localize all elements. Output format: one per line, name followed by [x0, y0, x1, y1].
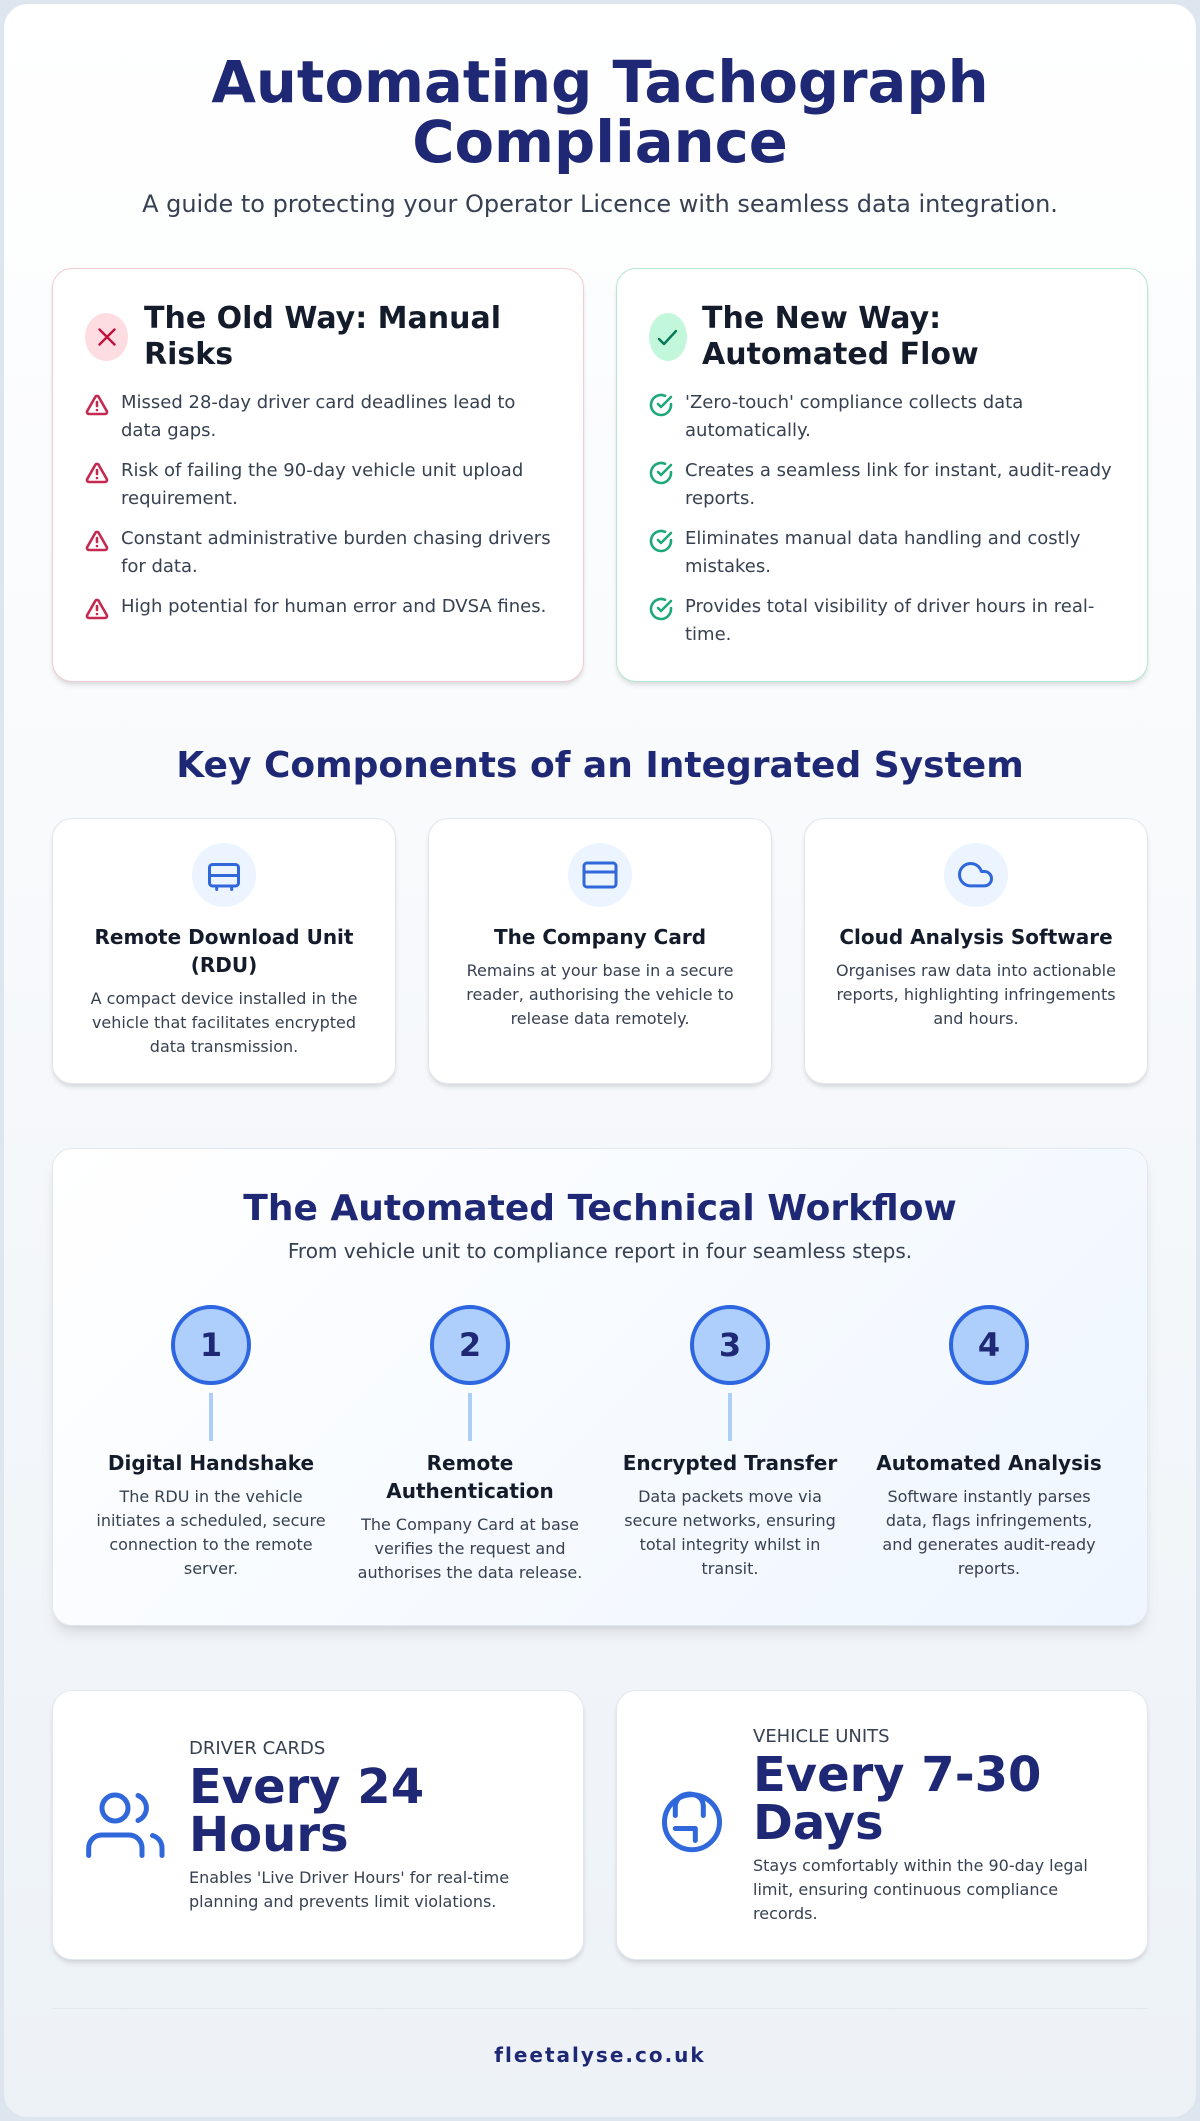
risk item 3: Constant administrative burden chasing drivers: [121, 528, 551, 549]
text: remote download unit: [90, 925, 357, 1056]
step description 2: authorises the data release.: [358, 1563, 582, 1582]
workflow subtitle: From vehicle unit to compliance report in four seamless steps.: [288, 1239, 912, 1263]
text: remote download unit: A compact device installed in the: [91, 989, 357, 1008]
benefit item 2: reports.: [685, 488, 755, 509]
step description 4: and generates audit-ready: [882, 1535, 1096, 1554]
step title 2: Remote: [427, 1451, 513, 1475]
text: driver cards: planning and prevents limit violations.: [189, 1892, 496, 1911]
step description 1: initiates a scheduled, secure: [96, 1511, 326, 1530]
step title 2: [386, 1451, 554, 1503]
step 2: [358, 1305, 582, 1582]
step description 1: connection to the remote: [109, 1535, 313, 1554]
icon: remote download unit: [192, 843, 256, 907]
step number 3: [690, 1305, 770, 1385]
step description 1: server.: [184, 1559, 238, 1578]
benefit item 1: 'Zero-touch' compliance collects data: [685, 392, 1023, 413]
title: [211, 48, 989, 176]
heading: the old way: The Old Way: Manual: [144, 301, 501, 336]
text: driver cards: Hours: [189, 1806, 349, 1862]
heading: the new way: The New Way:: [702, 301, 941, 336]
text: cloud analysis software: and hours.: [933, 1009, 1019, 1028]
panel: technical workflow: [52, 1148, 1148, 1626]
heading: the new way: Automated Flow: [702, 337, 979, 372]
panel: vehicle units stat: [616, 1690, 1148, 1960]
icon: cross badge: [85, 313, 128, 361]
step number 4: [949, 1305, 1029, 1385]
risk item 2: [86, 460, 523, 509]
risk item 3: [86, 528, 551, 577]
panel: cloud analysis software: [804, 818, 1148, 1084]
step description 3: Data packets move via: [638, 1487, 822, 1506]
heading: the new way: [702, 301, 979, 372]
icon: check badge: [649, 313, 687, 361]
icon: vehicle unit gauge: [662, 1792, 722, 1852]
risk item 2: Risk of failing the 90-day vehicle unit upload: [121, 460, 523, 481]
risk item 4: High potential for human error and DVSA fines.: [121, 596, 546, 617]
text: the company card: The Company Card: [494, 925, 706, 949]
step description 4: [882, 1487, 1096, 1578]
benefit item 1: automatically.: [685, 420, 811, 441]
title: Compliance: [412, 108, 788, 176]
text: the company card: Remains at your base in a secure: [467, 961, 733, 980]
text: vehicle units: VEHICLE UNITS: [753, 1726, 890, 1746]
footer text: fleetalyse.co.uk: [494, 2043, 706, 2067]
step description 1: The RDU in the vehicle: [119, 1487, 303, 1506]
panel: the new way: [616, 268, 1148, 682]
step number 2: 2: [459, 1326, 481, 1364]
subtitle: A guide to protecting your Operator Licence with seamless data integration.: [142, 190, 1058, 218]
text: cloud analysis software: reports, highlighting infringements: [836, 985, 1116, 1004]
step description 4: reports.: [958, 1559, 1020, 1578]
benefit item 4: time.: [685, 624, 731, 645]
panel: remote download unit: [52, 818, 396, 1084]
risk item 1: data gaps.: [121, 420, 216, 441]
text: vehicle units: [753, 1726, 1088, 1923]
step description 3: [624, 1487, 836, 1578]
text: remote download unit: (RDU): [191, 953, 257, 977]
benefit item 3: Eliminates manual data handling and costly: [685, 528, 1080, 549]
text: remote download unit: vehicle that facilitates encrypted: [92, 1013, 356, 1032]
step 1: [96, 1305, 326, 1578]
footer divider: [52, 2008, 1148, 2009]
benefit item 4: [650, 596, 1094, 645]
step description 2: The Company Card at base: [361, 1515, 579, 1534]
benefit item 1: [650, 392, 1023, 441]
step title 2: Authentication: [386, 1479, 554, 1503]
step description 1: [96, 1487, 326, 1578]
step number 3: 3: [719, 1326, 741, 1364]
text: remote download unit: Remote Download Unit: [95, 925, 353, 949]
step 3: [623, 1305, 838, 1578]
step description 2: verifies the request and: [374, 1539, 566, 1558]
text: the company card: release data remotely.: [511, 1009, 689, 1028]
text: vehicle units: Every 7-30: [753, 1746, 1041, 1802]
icon: company card: [568, 843, 632, 907]
step description 3: transit.: [702, 1559, 758, 1578]
step number 1: [171, 1305, 251, 1385]
panel: driver cards stat: [52, 1690, 584, 1960]
text: driver cards: Enables 'Live Driver Hours' for real-time: [189, 1868, 509, 1887]
panel: the company card: [428, 818, 772, 1084]
benefit item 3: [650, 528, 1080, 577]
text: driver cards: [189, 1738, 509, 1911]
risk item 1: Missed 28-day driver card deadlines lead to: [121, 392, 515, 413]
text: cloud analysis software: Organises raw data into actionable: [836, 961, 1116, 980]
benefit item 2: [650, 460, 1112, 509]
risk item 1: [86, 392, 515, 441]
benefit item 2: Creates a seamless link for instant, audit-ready: [685, 460, 1112, 481]
benefit item 3: mistakes.: [685, 556, 771, 577]
text: cloud analysis software: [836, 925, 1116, 1028]
risk item 3: for data.: [121, 556, 198, 577]
text: vehicle units: Stays comfortably within the 90-day legal: [753, 1856, 1088, 1875]
step title 3: Encrypted Transfer: [623, 1451, 837, 1475]
text: vehicle units: Days: [753, 1794, 884, 1850]
text: driver cards: Every 24: [189, 1758, 424, 1814]
heading: technical workflow: The Automated Technical Workflow: [243, 1188, 957, 1228]
step description 2: [358, 1515, 582, 1582]
step title 4: Automated Analysis: [876, 1451, 1102, 1475]
step description 4: data, flags infringements,: [886, 1511, 1092, 1530]
heading: key components: Key Components of an Integrated System: [176, 744, 1024, 786]
step number 1: 1: [200, 1326, 222, 1364]
text: vehicle units: records.: [753, 1904, 818, 1923]
text: the company card: reader, authorising the vehicle to: [466, 985, 734, 1004]
icon: cloud: [944, 843, 1008, 907]
step title 1: Digital Handshake: [108, 1451, 314, 1475]
title: Automating Tachograph: [211, 48, 989, 116]
text: driver cards: DRIVER CARDS: [189, 1738, 325, 1758]
step description 3: total integrity whilst in: [640, 1535, 820, 1554]
step number 2: [430, 1305, 510, 1385]
icon: users: [86, 1792, 164, 1858]
step 4: [876, 1305, 1102, 1578]
risk item 2: requirement.: [121, 488, 238, 509]
text: cloud analysis software: Cloud Analysis Software: [839, 925, 1113, 949]
text: vehicle units: limit, ensuring continuous compliance: [753, 1880, 1058, 1899]
step description 3: secure networks, ensuring: [624, 1511, 836, 1530]
text: remote download unit: data transmission.: [150, 1037, 298, 1056]
step number 4: 4: [978, 1326, 1000, 1364]
panel: the old way: [52, 268, 584, 682]
benefit item 4: Provides total visibility of driver hours in real-: [685, 596, 1094, 617]
text: the company card: [466, 925, 734, 1028]
heading: the old way: Risks: [144, 337, 233, 372]
heading: the old way: [144, 301, 501, 372]
step description 4: Software instantly parses: [887, 1487, 1091, 1506]
